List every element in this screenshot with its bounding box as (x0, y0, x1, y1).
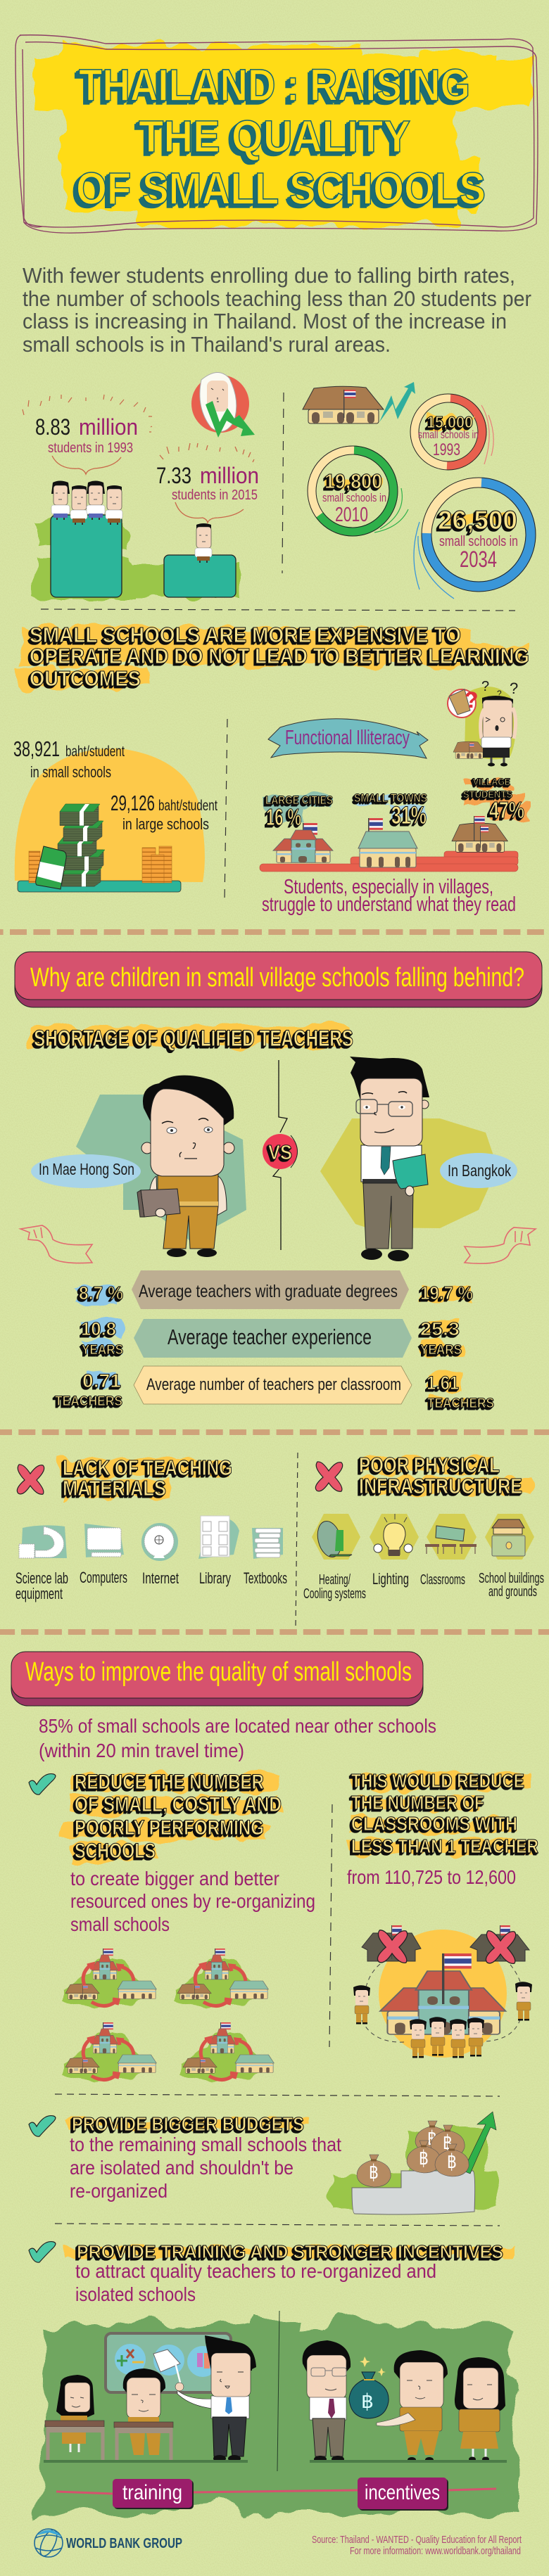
yellow highlights (327, 419, 514, 528)
ring labels: small schools in (418, 429, 479, 441)
illustration: teacher in Mae Hong Son (137, 1076, 234, 1257)
heading: small schools are more expensive: OUTCOMES (30, 666, 141, 691)
recommendation: reduce the number: to create bigger and better (70, 1868, 279, 1889)
logo: World Bank Group (34, 2527, 182, 2558)
illustration: growing money bags (331, 2112, 496, 2214)
intro to improvements (39, 1715, 436, 1761)
literacy percentages (265, 776, 524, 830)
literacy percentages: 31% (391, 802, 427, 829)
panel: falling enrollment chart (23, 372, 259, 598)
source note (312, 2534, 522, 2557)
recommendation: training and incentives: to attract quality teachers to re-organized and (75, 2260, 436, 2282)
comparison values left: 8.7 % (79, 1282, 123, 1303)
cost labels (13, 737, 217, 833)
comparison bar: teachers per classroom: Average number of teachers per classroom (146, 1375, 401, 1394)
recommendation: training and incentives: isolated schools (75, 2283, 196, 2305)
material labels: Science lab (15, 1569, 68, 1587)
recommendation: reduce the number: REDUCE THE NUMBER (75, 1771, 264, 1794)
literacy percentages: LARGE CITIES (265, 793, 333, 807)
recommendation: reduce the number: POORLY PERFORMING (75, 1816, 264, 1839)
8.83 million: million (79, 414, 138, 440)
ring: 2034 (414, 478, 536, 599)
heading: LACK OF TEACHING (63, 1455, 232, 1480)
literacy percentages: 47% (489, 797, 524, 823)
panel: number of small schools (303, 382, 536, 599)
recommendation: bigger budgets: are isolated and shouldn't be (70, 2157, 294, 2179)
label: In Mae Hong Son: In Mae Hong Son (39, 1160, 134, 1178)
recommendation: bigger budgets: to the remaining small schools that (70, 2134, 341, 2155)
banner: why are children falling behind (15, 952, 542, 1007)
comparison values right: YEARS (420, 1343, 462, 1358)
panel: training and incentives scene (39, 2311, 514, 2513)
7.33 million: students in 2015 (172, 487, 258, 503)
boy student at desk (114, 2368, 173, 2462)
material labels: Internet (142, 1569, 179, 1587)
illustration: merged school (353, 1925, 532, 2058)
heading: MATERIALS (63, 1476, 166, 1500)
ring labels: 1993 (433, 440, 460, 459)
literacy percentages: 16 % (266, 804, 301, 830)
school clusters (65, 1949, 274, 2081)
ribbon line (56, 2489, 496, 2494)
intro to improvements: 85% of small schools are located near other schools (39, 1715, 436, 1737)
ribbon title (268, 719, 428, 758)
teal base (18, 881, 181, 892)
cost labels: in small schools (30, 763, 111, 781)
confused student: ? (481, 679, 489, 694)
recommendation: training and incentives (29, 2241, 514, 2305)
title text: THAILAND : RAISING (79, 60, 470, 110)
coins (29, 846, 172, 883)
teacher with pointer (175, 2335, 256, 2462)
recommendation: reduce classrooms: CLASSROOMS WITH (351, 1813, 517, 1835)
panel: poor physical infrastructure (303, 1453, 544, 1602)
ring labels: small schools in (439, 534, 518, 549)
cost labels: 38,921 (13, 737, 60, 761)
ring: 1993 (410, 394, 493, 470)
material labels (15, 1569, 287, 1602)
cost labels: 29,126 (111, 791, 155, 815)
confused student: ? (510, 680, 518, 697)
infrastructure labels: Cooling systems (303, 1586, 366, 1602)
man with glasses presenting bag (303, 2340, 351, 2463)
intro text block: With fewer students enrolling due to falling birth rates, (23, 263, 515, 288)
icon: check (29, 2242, 56, 2262)
7.33 million (156, 463, 259, 503)
panel: lack of teaching materials (15, 1455, 287, 1602)
logo: World Bank Group: WORLD BANK GROUP (66, 2536, 182, 2551)
icon: textbooks (252, 1528, 283, 1559)
icon: check (29, 1774, 56, 1794)
literacy percentages: SMALL TOWNS (354, 791, 427, 805)
icon: school grounds (485, 1514, 534, 1560)
brackets and rays (23, 395, 254, 523)
recommendation: bigger budgets (29, 2112, 496, 2214)
title text: THE QUALITY (139, 111, 410, 162)
recommendation: reduce classrooms (347, 1770, 538, 2058)
comparison values left (55, 1282, 123, 1409)
icon: school and rising arrow (303, 382, 415, 423)
students on 1993 pedestal (51, 481, 122, 525)
green brush behind pedestals (35, 519, 239, 598)
comparison values left: TEACHERS (55, 1394, 122, 1409)
title text (76, 60, 486, 214)
ring: 2010 (308, 446, 408, 536)
comparison values right (420, 1282, 494, 1411)
schools on steps (273, 816, 507, 867)
ring labels: 15,000 (427, 413, 473, 431)
comparison values right: 25.3 (420, 1318, 460, 1339)
student on 2015 pedestal (195, 523, 212, 563)
ribbon title: Functional Illiteracy (285, 727, 410, 749)
yellow blob (15, 748, 205, 882)
heading: POOR PHYSICAL (359, 1453, 500, 1477)
banner: ways to improve: Ways to improve the quality of small schools (25, 1657, 412, 1687)
icon: baby with falling arrow (191, 372, 255, 438)
heading: small schools are more expensive: SMALL SCHOOLS ARE MORE EXPENSIVE TO (30, 623, 461, 647)
background hexagon left (76, 1095, 246, 1241)
recommendation: bigger budgets: PROVIDE BIGGER BUDGETS (72, 2113, 304, 2135)
material labels: equipment (15, 1585, 63, 1602)
comparison values right: 1.61 (427, 1372, 459, 1394)
literacy caption (262, 876, 516, 916)
infrastructure labels (303, 1570, 544, 1602)
label: training: training (122, 2481, 182, 2504)
infrastructure labels: Classrooms (420, 1572, 465, 1588)
banner: ways to improve (11, 1652, 423, 1706)
teacher receiving (377, 2350, 448, 2463)
ring labels: 2010 (335, 504, 368, 526)
recommendation: reduce the number: OF SMALL, COSTLY AND (75, 1793, 282, 1816)
label: In Bangkok (440, 1153, 517, 1188)
recommendation: reduce classrooms: from 110,725 to 12,600 (347, 1866, 516, 1888)
cost labels: in large schools (122, 815, 209, 833)
versus lightning divider: VS (268, 1142, 292, 1164)
illustration: teacher in Bangkok (350, 1057, 429, 1261)
cost labels: baht/student (158, 798, 217, 814)
comparison values left: 0.71 (82, 1370, 121, 1391)
label: incentives: incentives (365, 2481, 440, 2504)
panel: functional illiteracy (260, 679, 529, 916)
comparison values left: 10.8 (81, 1318, 116, 1339)
title text: OF SMALL SCHOOLS (76, 163, 486, 214)
7.33 million: million (200, 463, 259, 488)
label: training (113, 2479, 194, 2509)
red steps (260, 851, 518, 872)
ring labels: 19,800 (324, 471, 382, 493)
intro text block: class is increasing in Thailand. Most of the increase in (23, 309, 507, 333)
comparison values left: YEARS (82, 1343, 123, 1358)
heading (61, 1455, 232, 1500)
label: In Bangkok: In Bangkok (448, 1161, 511, 1180)
ring labels (322, 413, 518, 572)
comparison bar: graduate degrees (132, 1270, 409, 1309)
money bag: ฿ (361, 2390, 374, 2412)
icon: computer (84, 1524, 124, 1557)
icon: fan (312, 1514, 360, 1560)
label: incentives (358, 2478, 448, 2511)
pedestal: 1993 (51, 515, 122, 597)
comparison bar: teacher experience: Average teacher experience (168, 1325, 372, 1349)
ring labels: small schools in (322, 491, 386, 504)
comparison bar: graduate degrees: Average teachers with graduate degrees (139, 1282, 398, 1301)
infrastructure labels: Lighting (372, 1570, 409, 1588)
7.33 million: 7.33 (156, 463, 191, 488)
confused student (448, 679, 518, 767)
8.83 million: students in 1993 (48, 440, 133, 456)
background hexagon right (320, 1118, 498, 1228)
decorative ribbons (20, 1225, 536, 1263)
icon: science lab (19, 1525, 67, 1558)
recommendation: training and incentives: PROVIDE TRAINING AND STRONGER INCENTIVES (77, 2241, 503, 2262)
material labels: Textbooks (244, 1569, 287, 1587)
label blobs (265, 781, 529, 824)
comparison bar: teachers per classroom (134, 1366, 412, 1404)
8.83 million: 8.83 (35, 414, 70, 440)
material labels: Library (199, 1569, 231, 1587)
material labels: Computers (80, 1569, 127, 1586)
girl student at desk (45, 2375, 104, 2462)
icon: red cross (17, 1465, 44, 1494)
intro text block (23, 263, 531, 357)
divider (277, 2311, 279, 2471)
intro text block: small schools is in Thailand's rural areas. (23, 332, 391, 357)
panel: cost per student (13, 737, 217, 892)
intro to improvements: (within 20 min travel time) (39, 1740, 244, 1761)
ring labels: 26,500 (438, 506, 517, 535)
vertical dashed divider (282, 393, 284, 573)
icon: library (198, 1516, 239, 1559)
comparison values right: TEACHERS (427, 1396, 494, 1411)
recommendation: reduce the number: small schools (70, 1913, 170, 1935)
confused student: ? (465, 687, 479, 713)
comparison values right: 19.7 % (420, 1282, 473, 1303)
recommendation: bigger budgets: re-organized (70, 2180, 168, 2202)
title panel (15, 35, 538, 233)
icon: check (29, 2116, 56, 2136)
icon: red cross (315, 1462, 343, 1491)
icon: internet (141, 1523, 178, 1561)
cost labels: baht/student (65, 744, 125, 760)
confused student: ? (497, 689, 502, 699)
ring labels: 2034 (460, 547, 497, 572)
recommendation: reduce classrooms: THE NUMBER OF (351, 1792, 484, 1813)
icon: classroom (425, 1514, 477, 1560)
pedestal: 2015 (164, 555, 236, 597)
heading (359, 1453, 532, 1498)
heading: small schools are more expensive (15, 623, 529, 691)
label: In Mae Hong Son (31, 1154, 141, 1188)
comparison bar: teacher experience (134, 1319, 412, 1358)
ground shadow (44, 2460, 507, 2463)
money bag (349, 2357, 389, 2418)
recommendation: reduce the number (29, 1771, 315, 2081)
icon: light bulb (370, 1514, 419, 1560)
blackboard (106, 2333, 231, 2392)
recommendation: reduce the number: resourced ones by re-organizing (70, 1890, 315, 1912)
literacy percentages: VILLAGE (473, 776, 510, 787)
recommendation: reduce the number: SCHOOLS (75, 1839, 156, 1863)
female teacher (455, 2357, 505, 2462)
versus lightning divider (263, 1060, 298, 1250)
infrastructure labels: Heating/ (319, 1572, 351, 1588)
8.83 million (35, 414, 138, 456)
heading: shortage of qualified teachers: SHORTAGE OF QUALIFIED TEACHERS (34, 1026, 353, 1051)
literacy percentages: STUDENTS (463, 789, 512, 800)
money stacks (36, 804, 105, 889)
